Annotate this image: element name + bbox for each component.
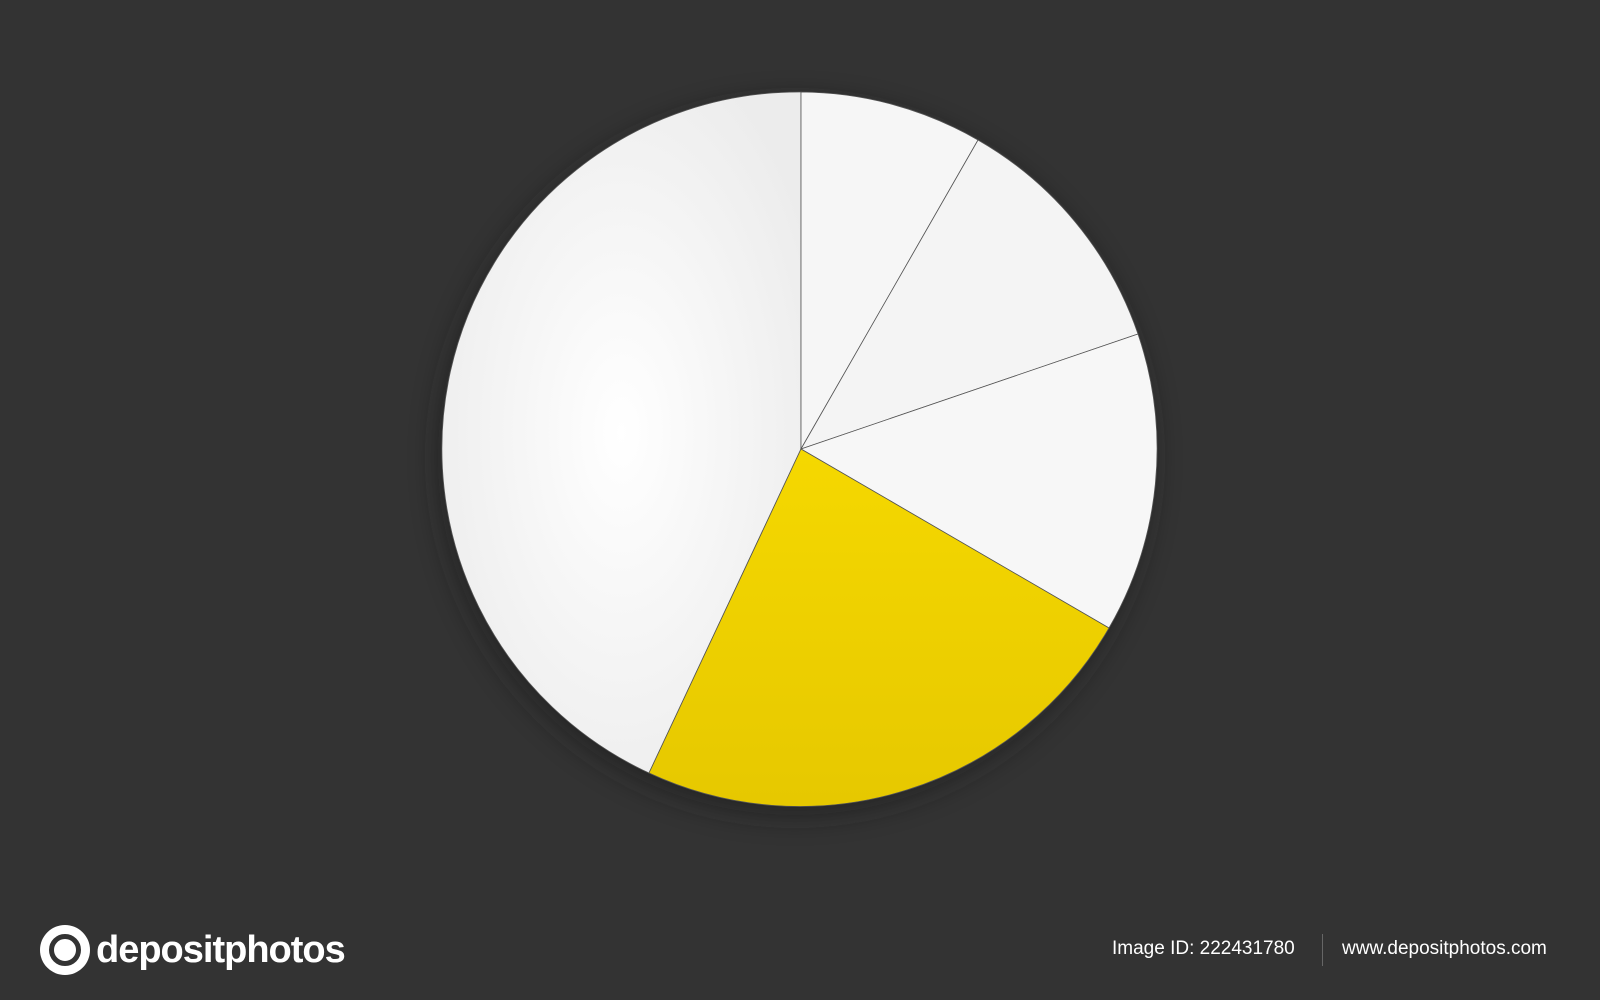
footer logo: depositphotos [96,928,345,970]
footer image id: Image ID: 222431780 [1112,938,1295,959]
slice: white top [801,92,978,449]
footer logo [40,925,345,975]
slice: white upper-right [801,140,1138,449]
slice: white right [801,334,1157,628]
slice: large white [442,92,801,773]
footer url: www.depositphotos.com [1342,938,1547,959]
slice: yellow highlighted [649,449,1109,806]
